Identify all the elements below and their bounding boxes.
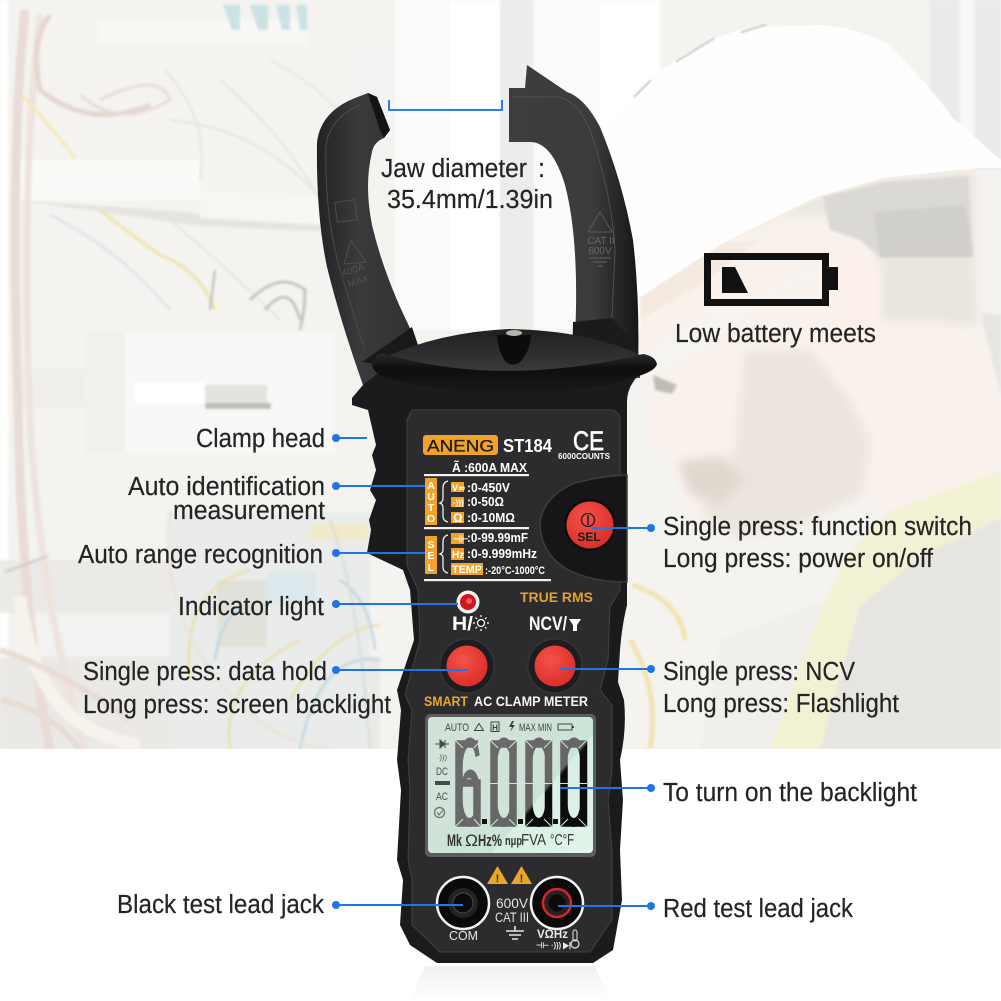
- worker: hair: [794, 172, 976, 324]
- input jack symbols: ⊣⊢ ·))) ▶|: [536, 940, 571, 950]
- SEL spec block: L: [428, 562, 435, 574]
- callout: auto range: Auto range recognition: [78, 541, 323, 569]
- background: wires: [0, 10, 685, 749]
- counts: 6000COUNTS: [558, 451, 610, 461]
- warning triangles: [487, 866, 532, 885]
- LCD reading digits: [455, 713, 588, 854]
- SEL spec block: [425, 531, 545, 577]
- worker: hard hat: [640, 25, 1001, 297]
- LCD decimal points: [482, 819, 558, 824]
- meter body silhouette: [352, 374, 640, 963]
- SEL button: SEL: [577, 530, 601, 544]
- callout: NCV: Long press: Flashlight: [663, 690, 899, 718]
- callout: auto identification: [128, 473, 425, 525]
- spec dividers: [424, 474, 551, 581]
- callout: red test lead: Red test lead jack: [663, 895, 853, 923]
- LCD top indicators: MAX MIN: [519, 722, 552, 734]
- right jaw: [509, 65, 640, 372]
- LCD top indicators: AUTO: [445, 722, 469, 734]
- icon: low battery: [708, 256, 838, 302]
- callout: black test lead: Black test lead jack: [117, 891, 324, 919]
- callout: indicator light: [178, 593, 458, 621]
- AUTO spec block: :0-50Ω: [467, 495, 504, 509]
- LCD main reading: [455, 713, 588, 854]
- background: worker: [610, 25, 1001, 749]
- clamp meter: [317, 65, 657, 963]
- COM jack: [437, 877, 489, 929]
- LCD side indicators: AC: [436, 791, 448, 803]
- indicator LED: [456, 590, 480, 614]
- worker: beard: [700, 350, 870, 538]
- callout: indicator light: Indicator light: [178, 593, 324, 621]
- hold / backlight label: H/: [452, 614, 474, 635]
- model name: ST184: [503, 436, 552, 456]
- LCD top indicators: H: [492, 724, 498, 732]
- LCD screen: [425, 713, 596, 857]
- LCD unit row: Mk: [447, 831, 462, 850]
- worker: safety glasses: [640, 265, 820, 375]
- CE mark: CE: [573, 426, 604, 456]
- AUTO spec block: A: [427, 480, 435, 492]
- TRUE RMS label: TRUE RMS: [520, 590, 593, 605]
- SEL spec block: TEMP: [452, 564, 482, 576]
- callout: function switch: [592, 513, 972, 573]
- AUTO spec block: :0-450V: [467, 481, 511, 495]
- worker: moustache: [678, 454, 739, 502]
- hold button: [440, 639, 494, 693]
- LCD side indicators: DC: [436, 766, 448, 778]
- jaw diameter callout: Jaw diameter: [381, 155, 527, 183]
- SEL spec block: Hz: [452, 550, 464, 561]
- soft floor reflection: [410, 966, 610, 1001]
- jaw diameter callout: [381, 155, 553, 214]
- worker: forehead shadow: [640, 240, 760, 320]
- front panel: [405, 410, 620, 952]
- AUTO spec block: ·))): [453, 498, 464, 508]
- SEL spec block: S: [427, 539, 435, 551]
- AUTO spec block: U: [427, 491, 435, 503]
- AUTO spec block: [425, 478, 515, 525]
- worker: ear: [833, 251, 880, 367]
- LCD top indicators: [445, 721, 574, 734]
- low battery label: Low battery meets: [675, 320, 876, 348]
- callout: data hold: Long press: screen backlight: [83, 691, 391, 719]
- head lip: [372, 353, 657, 393]
- jaw size bracket: [389, 100, 502, 110]
- LCD reading digits: 6: [455, 713, 483, 854]
- callout: function switch: Single press: function switch: [663, 513, 972, 541]
- photo base: [0, 0, 1001, 749]
- callout: clamp head: Clamp head: [196, 425, 325, 453]
- worker: hard hat strap: [823, 176, 973, 257]
- worker: hard hat vents: [635, 25, 765, 96]
- warning triangles: !: [496, 873, 499, 885]
- worker: vest and shirt: [770, 471, 1001, 749]
- input jack symbols: VΩHz: [537, 929, 568, 941]
- LCD reading digits: 0: [560, 713, 588, 854]
- callout: backlight: To turn on the backlight: [663, 779, 917, 807]
- right jaw markings: CAT II: [587, 236, 615, 247]
- left jaw markings: [335, 200, 371, 290]
- AUTO spec block: V≂: [452, 483, 466, 493]
- callout: red test lead: [558, 895, 853, 923]
- current range: Ã :600A MAX: [452, 460, 528, 475]
- NCV sensor: [497, 335, 531, 364]
- LCD unit row: FVA: [521, 832, 547, 849]
- product name: AC CLAMP METER: [474, 694, 588, 709]
- rating label: 600V: [496, 896, 528, 911]
- left jaw: [317, 93, 420, 385]
- callout: auto identification: Auto identification: [128, 473, 325, 501]
- LCD side indicators: [434, 740, 450, 818]
- callout: black test lead: [117, 891, 463, 919]
- SEL spec block: :-20°C-1000°C: [485, 565, 545, 577]
- right jaw markings: 600V: [588, 246, 612, 257]
- LCD unit row: nμp: [505, 833, 522, 848]
- LCD bezel: [425, 714, 596, 857]
- rating label: [495, 896, 529, 939]
- LCD unit row: Ω: [465, 831, 478, 850]
- NCV button: [528, 639, 582, 693]
- LCD reading digits: 0: [490, 713, 518, 854]
- warning triangles: !: [520, 873, 523, 885]
- rating label: CAT III: [495, 910, 529, 925]
- product name: SMART: [424, 694, 469, 709]
- background photo: electrician and wiring: [0, 0, 1001, 749]
- worker: face and neck: [640, 309, 660, 330]
- input jack symbols: [536, 929, 579, 950]
- callout: data hold: Single press: data hold: [83, 658, 327, 686]
- NCV sensor tip: [506, 330, 522, 336]
- LCD segment gaps: [455, 740, 587, 827]
- COM label: COM: [449, 928, 478, 943]
- LCD side indicators: ·))): [437, 753, 447, 762]
- callout: backlight: [560, 779, 917, 807]
- left jaw markings: MAX: [346, 273, 371, 290]
- SEL spec block: :0-9.999mHz: [467, 547, 537, 561]
- SEL button housing: [540, 475, 627, 582]
- worker: eye: [653, 375, 677, 394]
- LCD glass: [428, 717, 593, 853]
- hold / backlight label: [452, 614, 489, 635]
- SEL spec block: E: [427, 550, 435, 562]
- left jaw markings: 400A: [340, 262, 366, 279]
- product name: [424, 694, 588, 709]
- head dome: [383, 329, 640, 378]
- SEL spec block: ⊣⊢: [453, 534, 469, 544]
- worker: right shadow: [982, 314, 1000, 386]
- callout: data hold: [83, 658, 468, 719]
- LCD segment frames: [459, 744, 584, 823]
- SEL spec block: :0-99.99mF: [467, 531, 528, 545]
- LCD reading digits: 0: [525, 713, 553, 854]
- VOHz jack: [531, 877, 583, 929]
- brand badge: ANENG: [427, 436, 494, 456]
- LCD unit row: [447, 831, 574, 850]
- jaw diameter callout: :: [538, 155, 545, 183]
- LCD unit row: Hz%: [478, 831, 502, 850]
- callout: NCV: [560, 658, 899, 718]
- AUTO spec block: :0-10MΩ: [467, 511, 515, 525]
- jaw diameter callout: 35.4mm/1.39in: [387, 186, 553, 214]
- SEL button: [564, 499, 616, 551]
- callout: auto identification: measurement: [173, 497, 325, 525]
- callout: function switch: Long press: power on/off: [663, 545, 934, 573]
- AUTO spec block: T: [428, 502, 435, 514]
- LCD unit row: °C°F: [550, 832, 574, 849]
- background: electrical panel: [0, 0, 660, 748]
- AUTO spec block: O: [427, 513, 435, 525]
- AUTO spec block: Ω: [453, 511, 463, 525]
- NCV / flashlight label: NCV/: [529, 614, 568, 635]
- right jaw markings: [587, 212, 615, 266]
- callout: NCV: Single press: NCV: [663, 658, 855, 686]
